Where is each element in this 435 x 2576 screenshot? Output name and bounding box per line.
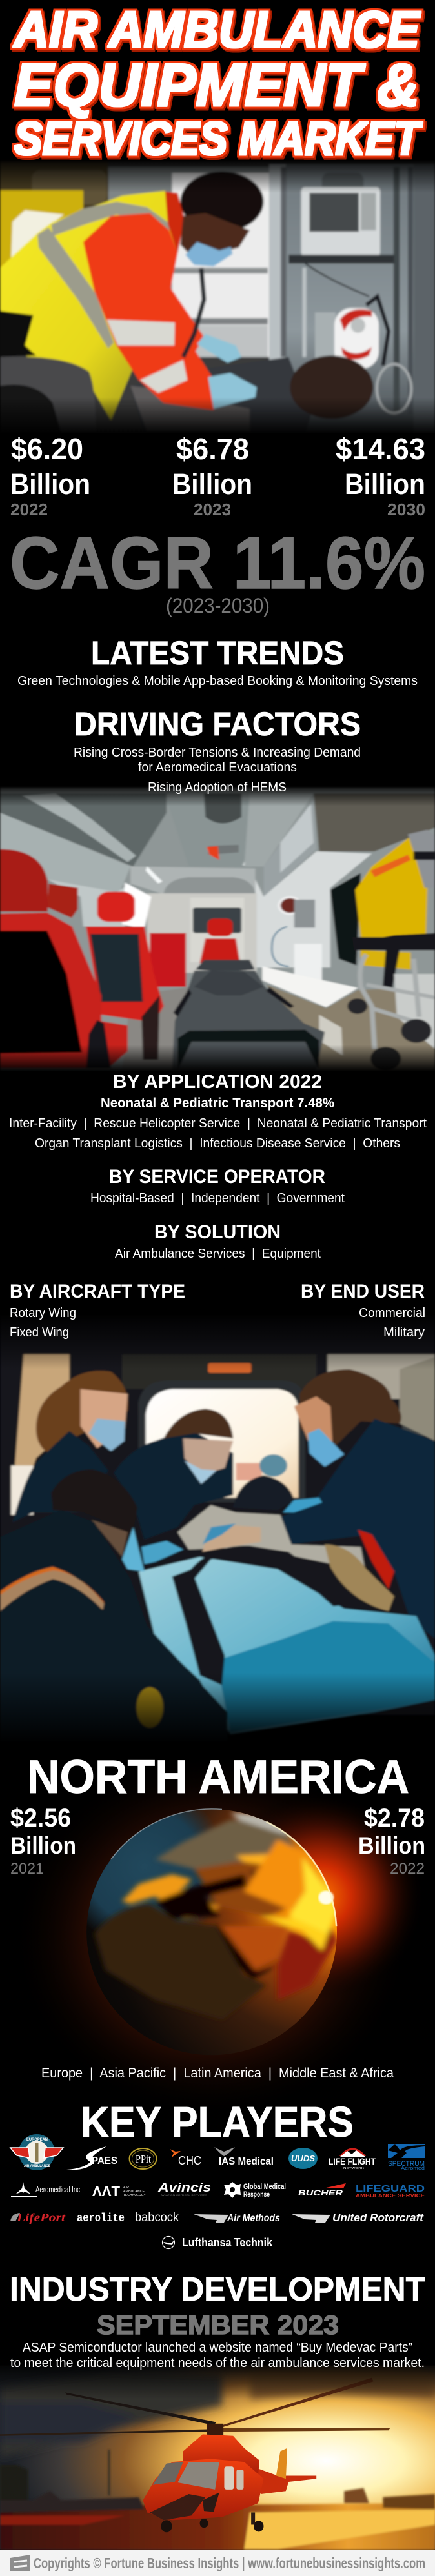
section: industry development: to meet the critical equipment needs of the air ambulance services market. [10,2356,425,2370]
logo: European Air Ambulance: EUROPEAN [26,2138,48,2142]
vest [0,191,177,421]
logo: United Rotorcraft: United Rotorcraft [332,2212,424,2224]
logo: Bucher [298,2183,346,2197]
logo: SPAES [66,2146,117,2170]
section: by solution: BY SOLUTION [154,1222,281,1243]
section: by solution [115,1222,321,1261]
photo: ambulance interior with red seats and stretcher [0,780,435,1077]
logo: Global Medical Response: Response [243,2190,270,2199]
logo: Life Flight Network [329,2148,376,2170]
photo: medics loading patient into ambulance [0,1313,435,1745]
top fade for helicopter photo [0,2361,435,2399]
logo: European Air Ambulance [10,2134,63,2170]
logo: babcock: babcock [135,2211,179,2224]
floor [122,987,192,1071]
other regions list: Europe | Asia Pacific | Latin America | Middle East & Africa [41,2066,394,2081]
section: by aircraft type: Fixed Wing [10,1325,69,1340]
logo: United Rotorcraft [292,2212,424,2224]
logo: Lufthansa Technik: Lufthansa Technik [182,2236,273,2249]
blanket [139,1557,435,1734]
section: by application: Organ Transplant Logistics | Infectious Disease Service | Others [35,1136,400,1151]
logo: Aeromedical Inc [11,2182,80,2197]
section: driving factors [74,706,361,795]
logo: AAT Air Ambulance Technology: AIR [123,2186,129,2190]
gloves [197,334,241,362]
section: by end user: Commercial [359,1306,425,1320]
seat 2 [97,892,135,922]
logo: AAT Air Ambulance Technology [92,2183,147,2199]
logo: IAS Medical [214,2147,274,2167]
stat: market size 2022: 2022 [10,500,48,519]
logo: Spectrum Aeromed [388,2144,425,2171]
stat: market size 2030: 2030 [387,500,425,519]
logo: Global Medical Response [224,2182,286,2199]
globe with sunrise glow [48,1785,412,2086]
section: by end user: Military [383,1325,425,1340]
stat: market size 2022: Billion [10,468,90,500]
stat: north america 2021: $2.56 [10,1804,71,1832]
foreground [0,311,36,357]
foreground medic [52,1469,137,1560]
section: by service operator: Hospital-Based | Independent | Government [90,1191,345,1205]
section: by application: Neonatal & Pediatric Transport 7.48% [101,1096,334,1111]
section: latest trends: Green Technologies & Mobile App-based Booking & Monitoring Systems [17,674,418,688]
logo: CHC [170,2149,201,2167]
logo: Avincis: Avincis [157,2181,211,2195]
logo: aerolite: aerolite [77,2212,125,2225]
logo: Air Methods [194,2213,280,2224]
section: latest trends [17,635,418,688]
heading: key players: KEY PLAYERS [81,2098,354,2146]
section: driving factors: for Aeromedical Evacuations [138,760,297,775]
section: latest trends: LATEST TRENDS [91,635,344,671]
stat: market size 2030 [336,432,425,519]
logo: Spectrum Aeromed: Aeromed [401,2166,425,2171]
stat: north america 2021: 2021 [10,1860,44,1878]
section: by aircraft type: BY AIRCRAFT TYPE [10,1281,185,1302]
logo: European Air Ambulance: AIR AMBULANCE [24,2165,50,2168]
section: industry development: ASAP Semiconductor launched a website named “Buy Medevac Parts” [23,2341,412,2355]
stat: market size 2023: 2023 [194,500,231,519]
section: driving factors: Rising Cross-Border Tensions & Increasing Demand [74,746,361,760]
stat: north america 2021: Billion [10,1832,76,1859]
stat: market size 2023 [172,432,252,519]
logo: Aeromedical Inc: Aeromedical Inc [35,2185,80,2194]
logo: AAT Air Ambulance Technology: AMBULANCE [123,2190,145,2194]
section: by service operator: BY SERVICE OPERATOR [109,1166,325,1187]
logo: SPAES: PAES [92,2155,117,2166]
stat: north america 2022: 2022 [390,1860,425,1878]
logo: Avincis: AVIATION CRITICAL SERVICES [161,2194,207,2197]
logo: Global Medical Response: Global Medical [243,2182,286,2191]
left medic [36,1371,128,1456]
logo: Bucher: BUCHER [298,2188,343,2197]
photo: paramedic examining patient in ambulance [0,155,435,462]
stat: market size 2030: Billion [345,468,425,500]
logo: IAS Medical: IAS Medical [219,2156,274,2167]
logo: CHC: CHC [178,2154,201,2167]
logo: PPit [129,2148,156,2169]
photo: red helicopter at sunset on helipad [0,2366,435,2550]
patient [130,357,311,435]
section: by service operator [90,1166,345,1205]
stat: market size 2022: $6.20 [11,432,83,466]
logo: UUDS: UUDS [291,2154,315,2163]
section: driving factors: DRIVING FACTORS [74,706,361,742]
section: by aircraft type: Rotary Wing [10,1306,76,1320]
background medic [233,1476,294,1510]
logo: AAT Air Ambulance Technology: TECHNOLOGY [123,2194,147,2197]
right medic [299,1369,401,1448]
stat: market size 2022 [10,432,90,519]
stat: market size 2023: Billion [172,468,252,500]
section: driving factors: Rising Adoption of HEMS [148,780,287,795]
head [181,172,263,232]
logo: LifePort: LifePort [16,2211,66,2224]
stat: north america 2021 [10,1804,76,1878]
section: industry development: SEPTEMBER 2023 [97,2310,339,2340]
section: by aircraft type [10,1281,185,1340]
far seat [47,884,77,918]
logo: Spectrum Aeromed: SPECTRUM [388,2160,425,2168]
counter and cabinets [262,966,358,1007]
logo: Lifeguard Ambulance Service [356,2183,425,2199]
heading: north america: NORTH AMERICA [27,1751,409,1803]
stat: north america 2022: Billion [358,1832,425,1859]
logo: UUDS [288,2148,318,2169]
seat 1 [0,849,48,911]
section: by solution: Air Ambulance Services | Equipment [115,1247,321,1261]
stretcher [196,960,255,971]
section: by end user: BY END USER [301,1281,425,1302]
footer [0,2550,435,2576]
section: industry development [10,2271,425,2370]
center medic [114,1429,233,1540]
stat: market size 2023: $6.78 [176,432,249,466]
title: EQUIPMENT & [14,51,420,119]
CAGR callout: (2023-2030) [166,594,270,617]
logo: Lifeguard Ambulance Service: AMBULANCE SERVICE [356,2192,425,2199]
logo: AAT Air Ambulance Technology: ΛΛT [92,2183,121,2199]
logo: Air Methods: Air Methods [227,2213,280,2224]
logo: Life Flight Network: LIFE FLIGHT [329,2156,376,2166]
section: by application: BY APPLICATION 2022 [113,1071,322,1093]
logo: PPit: PPit [136,2153,151,2165]
stat: north america 2022: $2.78 [364,1804,425,1832]
section: by end user [301,1281,425,1340]
section: by application: Inter-Facility | Rescue Helicopter Service | Neonatal & Pediatric Transport [9,1116,427,1131]
jacket [83,213,218,410]
strap [172,1569,225,1685]
right side equipment [278,896,302,915]
logo: Life Flight Network: NETWORK [343,2166,364,2170]
stat: north america 2022 [358,1804,425,1878]
section: by application [9,1071,427,1151]
stat: market size 2030: $14.63 [336,432,425,466]
patient head and gloves [177,1505,367,1576]
logo: Lifeguard Ambulance Service: LIFEGUARD [356,2183,425,2194]
title [13,1,423,165]
section: industry development: INDUSTRY DEVELOPMENT [10,2271,425,2308]
